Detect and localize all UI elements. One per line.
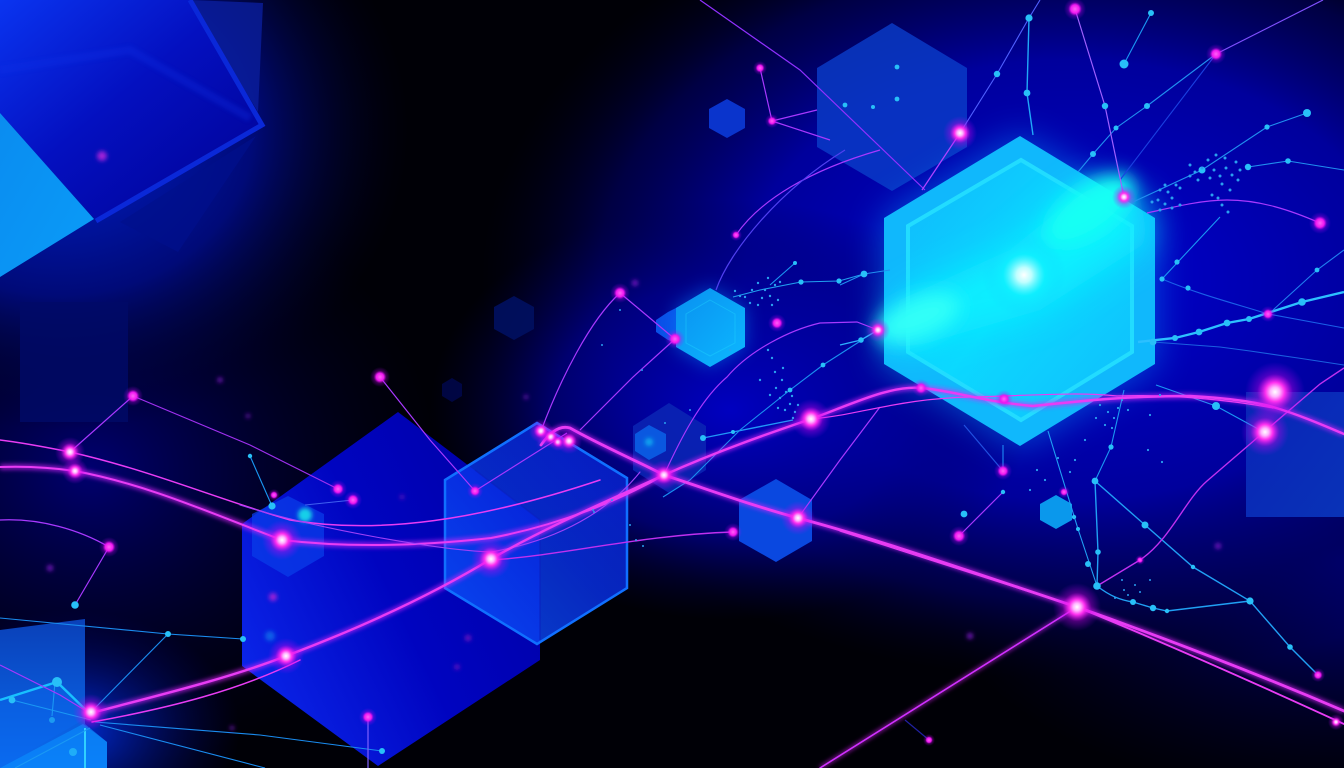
panel: right edge translucent square xyxy=(1246,392,1344,517)
hexagon: upper translucent xyxy=(817,23,967,191)
panel: top-left geometric facets xyxy=(0,0,263,277)
panel: bottom-left translucent squares xyxy=(0,619,107,768)
network: large magenta glowing nodes xyxy=(55,116,1344,730)
network: bright magenta strands xyxy=(0,388,1344,768)
hexagon: glass lower centre xyxy=(445,423,627,644)
hexagon: bright small cyan xyxy=(656,288,745,367)
hexagon: large lower-left blue xyxy=(242,412,540,766)
hexagon: tiny cyan lower right xyxy=(1040,495,1072,529)
hexagon: small cluster centre xyxy=(633,403,706,493)
hexagon: small glow inside lower-left xyxy=(252,496,324,641)
hexagon: lower right of centre xyxy=(739,479,812,562)
particle dots: faint purple xyxy=(47,280,1221,730)
hexagon: large bright cyan focal xyxy=(870,136,1155,446)
particle clusters xyxy=(593,155,1240,598)
network: glow beneath magenta strands xyxy=(0,388,1344,768)
hexagon: faint dark square and small hexes in the background xyxy=(20,99,745,422)
